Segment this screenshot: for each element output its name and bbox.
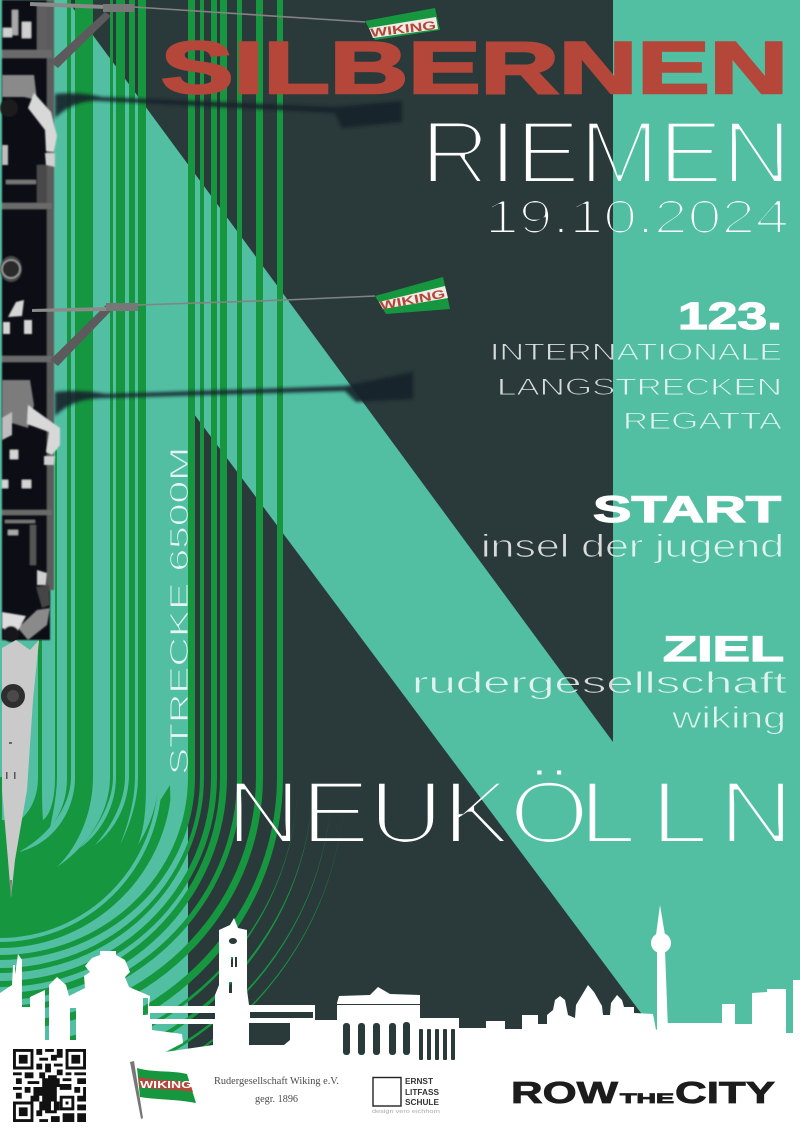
oar shadows on the water [55, 93, 413, 416]
boat interior [2, 0, 54, 640]
Wiking club flag logo: WIKING [140, 1080, 192, 1091]
Ernst Litfass Schule logo: SCHULE [405, 1098, 440, 1107]
club name text: gegr. 1896 [255, 1094, 298, 1105]
club name text [214, 1076, 339, 1105]
title: SILBERNEN: SILBERNEN [161, 28, 788, 109]
rower 4 [2, 570, 50, 642]
upper oar [30, 2, 365, 68]
vertical course length label: STRECKE 6500M [164, 447, 194, 775]
start block [481, 489, 784, 564]
finish location line 2: wiking [671, 700, 786, 735]
Row the City logo: ROW [511, 1075, 619, 1110]
TV tower [651, 905, 671, 1030]
start location: insel der jugend [481, 528, 784, 564]
rower 2 [0, 256, 32, 334]
Wiking club flag logo [130, 1061, 196, 1119]
oar blade flag 2: WIKING [379, 287, 446, 313]
Ernst Litfass Schule logo [372, 1077, 440, 1115]
finish location line 1: rudergesellschaft [412, 665, 788, 700]
finish heading: ZIEL [663, 630, 784, 669]
green track stripes curving into arcs [0, 0, 345, 1113]
teal slivers tapering into the green disc [2, 777, 158, 867]
Ernst Litfass Schule logo: design vero eichhorn [372, 1109, 440, 1115]
event description [490, 296, 783, 435]
museum columns [337, 1004, 455, 1060]
oar blade flag 1 [365, 8, 440, 40]
rower 3 [2, 380, 60, 465]
oar blade flag 1: WIKING [370, 18, 437, 40]
start heading: START [593, 489, 782, 530]
finish block [412, 630, 788, 735]
rower 1 [0, 75, 57, 167]
rowing boat seen from above [0, 0, 60, 898]
edition number: 123. [678, 296, 782, 338]
Berlin skyline silhouette [0, 905, 800, 1135]
place name: NEUKOELLN: NEUKÖLLN [227, 763, 793, 862]
lower oar [32, 296, 375, 366]
line: LANGSTRECKEN: LANGSTRECKEN [497, 374, 782, 401]
oars and riggers [30, 2, 375, 366]
club name text: Rudergesellschaft Wiking e.V. [214, 1076, 339, 1087]
Row the City logo [511, 1075, 775, 1110]
line: INTERNATIONALE: INTERNATIONALE [490, 339, 782, 366]
oar blade flag 2 [375, 277, 450, 314]
hull and bow [1, 640, 39, 898]
Row the City logo: THE [620, 1090, 674, 1106]
QR code [13, 1049, 86, 1122]
Row the City logo: CITY [675, 1075, 775, 1110]
Ernst Litfass Schule logo: ERNST [405, 1077, 433, 1086]
title: RIEMEN: RIEMEN [421, 102, 791, 202]
date: 19.10.2024 [485, 190, 789, 243]
line: REGATTA: REGATTA [623, 408, 783, 435]
Ernst Litfass Schule logo: LITFASS [405, 1088, 440, 1097]
